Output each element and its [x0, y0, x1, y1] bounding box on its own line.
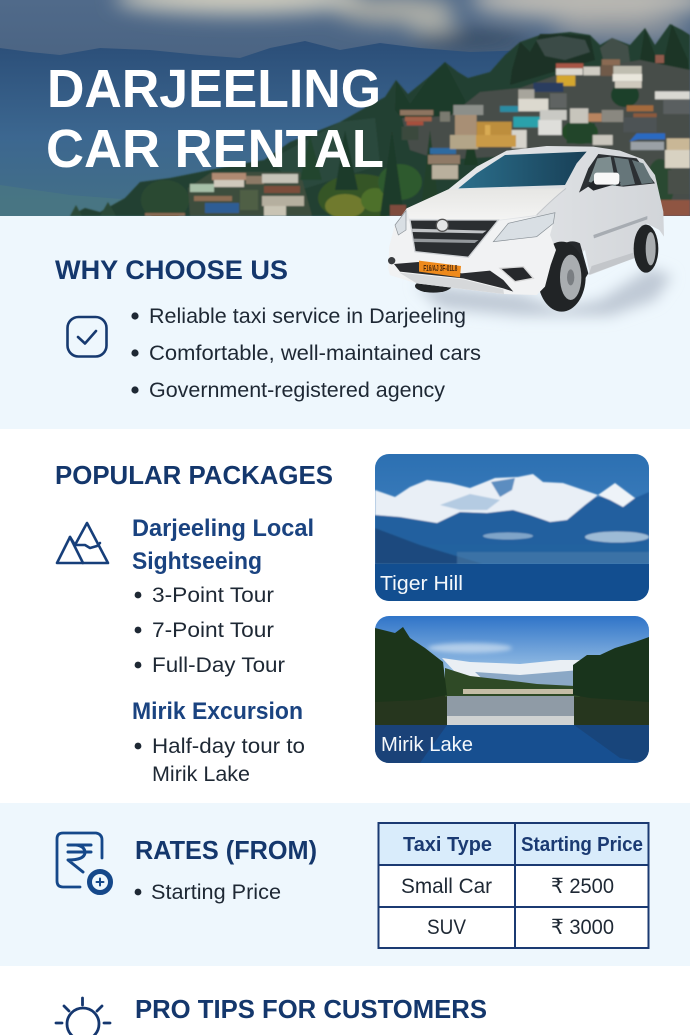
mountain ridge: [0, 41, 560, 216]
label band: [375, 725, 649, 763]
lake reflection: [447, 696, 574, 716]
buildings lower village: [190, 184, 214, 192]
shadow under car: [415, 268, 672, 316]
car: white MPV: [388, 146, 664, 312]
fog lamp: [500, 267, 533, 282]
list: why choose us: [131, 305, 481, 402]
label: Tiger Hill: [380, 573, 463, 595]
car body: [388, 146, 664, 295]
package: Mirik excursion: Mirik Excursion: [132, 698, 303, 725]
heading: pro tips: PRO TIPS FOR CUSTOMERS: [135, 994, 487, 1024]
icon: lightbulb sun: [56, 998, 110, 1035]
photo card: Mirik Lake: [375, 616, 649, 763]
valley: [445, 668, 580, 697]
list: why choose us: Government-registered agency: [149, 379, 446, 402]
front fascia: [388, 216, 556, 295]
hero photo: Darjeeling hillside: [0, 0, 690, 222]
grille: [410, 219, 498, 257]
package: Mirik excursion: Half-day tour to: [152, 735, 305, 758]
package: Mirik excursion: Mirik Lake: [152, 763, 250, 786]
buildings upper town, zoom coordinates: [400, 55, 690, 150]
mirror: [587, 173, 621, 191]
table: rates: [378, 823, 648, 948]
table: rates: SUV: [427, 916, 466, 939]
side windows: [579, 154, 655, 193]
trees right: [573, 637, 649, 702]
table: rates: Small Car: [401, 875, 492, 898]
town base: [402, 60, 690, 216]
far front wheel: [415, 279, 452, 293]
title: CAR RENTAL: [46, 119, 384, 179]
heading: popular packages: POPULAR PACKAGES: [55, 460, 333, 490]
hood: [407, 188, 565, 220]
lake: [375, 695, 649, 725]
icon: mountains: [57, 523, 108, 563]
table: rates: ₹ 2500: [551, 875, 614, 898]
front wheel: [538, 241, 588, 312]
buildings behind car: [430, 148, 456, 154]
list: rates: Starting Price: [151, 881, 281, 904]
forest and town: [70, 24, 690, 222]
lower bumper: [394, 262, 513, 292]
package: Darjeeling local sightseeing: Darjeeling Local: [132, 515, 314, 542]
package: Darjeeling local sightseeing: Full-Day Tour: [152, 654, 285, 677]
icon: checkbox: [68, 317, 106, 356]
snow peaks: [375, 474, 649, 564]
rear wheel: [634, 225, 658, 273]
label band: [375, 564, 649, 601]
package: Darjeeling local sightseeing: Sightseeing: [132, 548, 262, 575]
licence plate: F16/AJ 3F-01L8: [423, 263, 457, 273]
package: Darjeeling local sightseeing: [132, 515, 314, 677]
headlight: [493, 213, 555, 242]
title: DARJEELING: [47, 59, 381, 119]
panel: why choose us background: [0, 216, 690, 429]
trees left: [375, 627, 447, 702]
windshield: [458, 152, 587, 188]
package: Darjeeling local sightseeing: 7-Point Tour: [152, 619, 274, 642]
heading: rates: RATES (FROM): [135, 835, 317, 865]
panel: rates background: [0, 803, 690, 966]
list: why choose us: Comfortable, well-maintained cars: [149, 342, 481, 365]
table: rates: ₹ 3000: [551, 916, 614, 939]
table: rates: Taxi Type: [403, 834, 492, 856]
label: Mirik Lake: [381, 734, 473, 756]
door trim: [593, 216, 647, 238]
icon: rupee document: [57, 833, 110, 892]
table: rates: Starting Price: [521, 834, 643, 856]
list: why choose us: Reliable taxi service in Darjeeling: [149, 305, 466, 328]
package: Darjeeling local sightseeing: 3-Point Tour: [152, 584, 274, 607]
title: [48, 69, 382, 168]
package: Mirik excursion: [132, 698, 305, 786]
heading: why choose us: WHY CHOOSE US: [55, 255, 288, 285]
green tree clumps: [318, 174, 388, 216]
snow range: [442, 658, 580, 678]
licence plate: [419, 261, 461, 277]
photo card: Tiger Hill: [375, 454, 649, 601]
